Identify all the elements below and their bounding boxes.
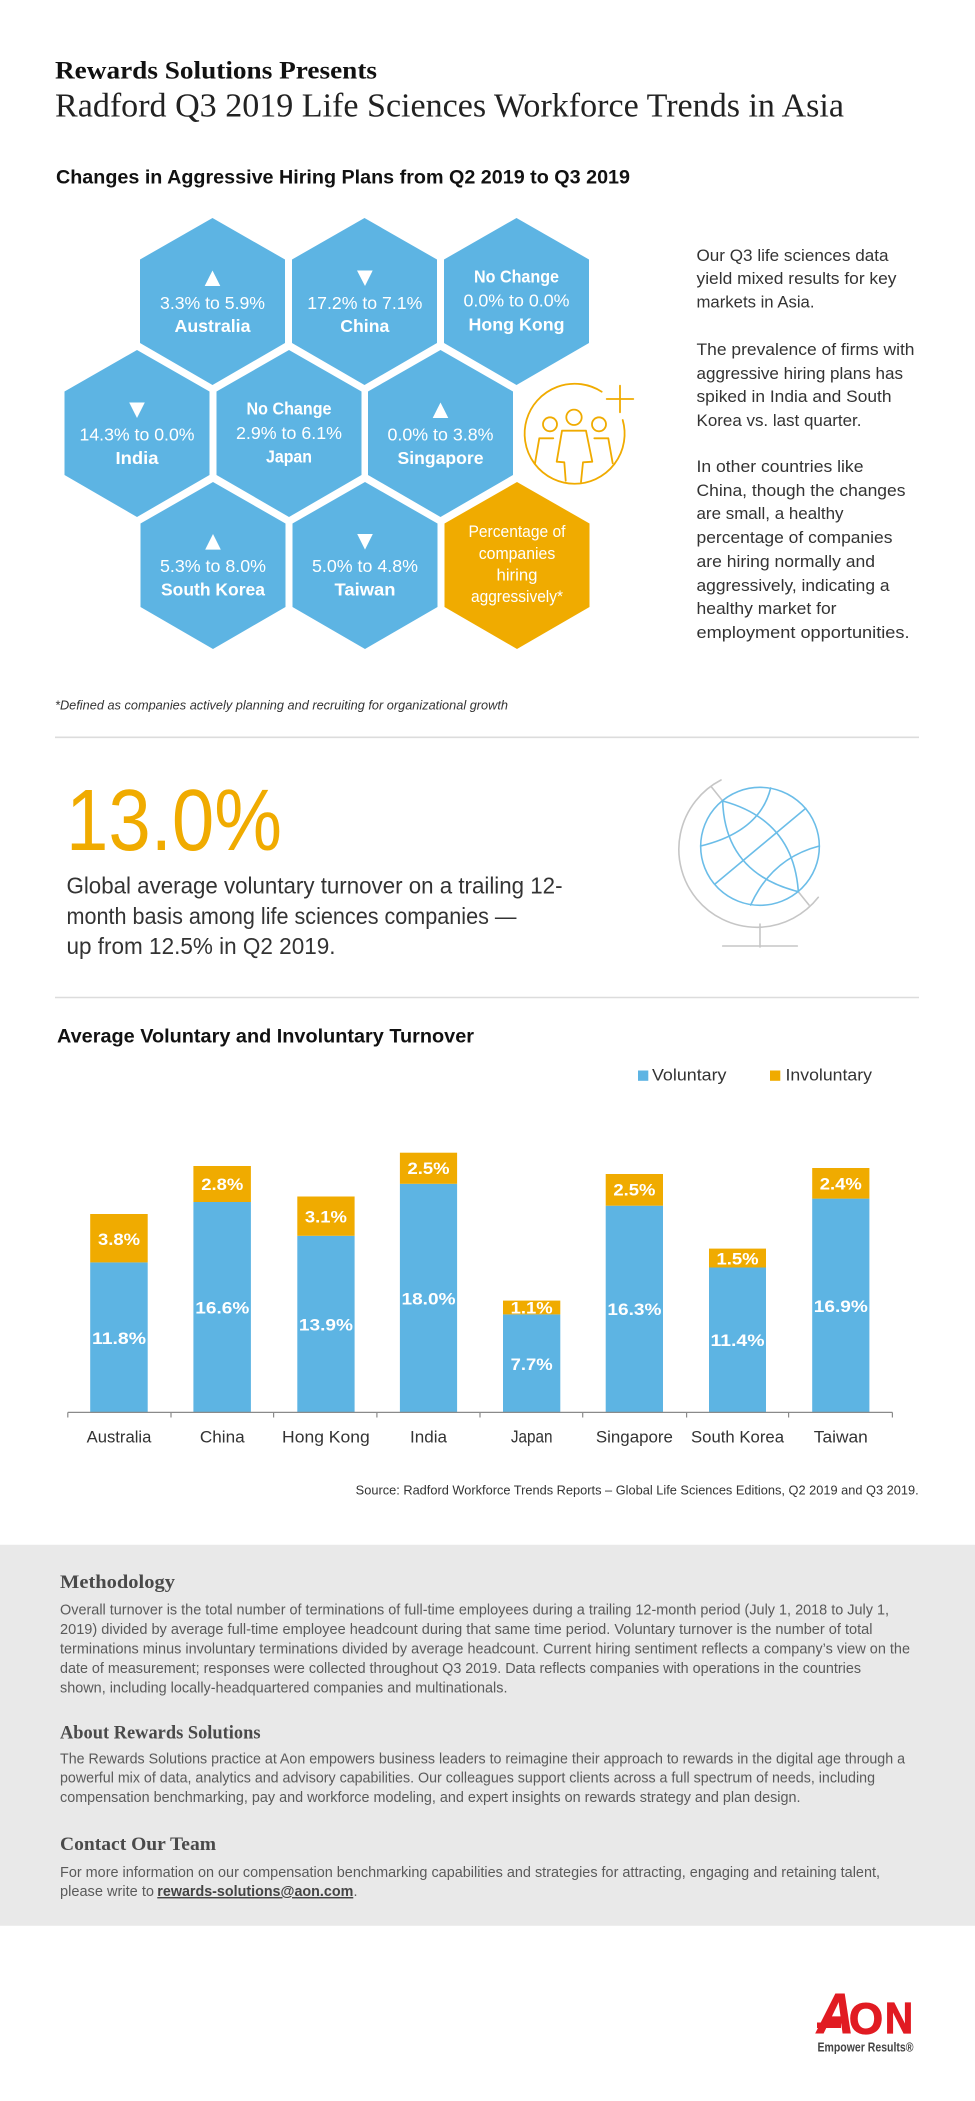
hexagon: South Korea — [140, 482, 286, 649]
bar: Taiwan: 2.4% — [820, 1174, 862, 1193]
logo: Aon Empower Results: N — [885, 1994, 913, 2043]
section: contact our team: For more information on our compensation benchmarking capabilities and strategies for attracting, engaging and retaining talent, — [60, 1865, 880, 1881]
section: contact our team: rewards-solutions@aon.com — [157, 1884, 353, 1900]
section: contact our team: . — [354, 1884, 357, 1900]
bar: Australia: Australia — [87, 1428, 152, 1446]
right column commentary — [696, 246, 914, 642]
right column commentary: employment opportunities. — [696, 623, 910, 642]
bar: Singapore — [596, 1174, 673, 1446]
bar: China — [193, 1166, 251, 1446]
chart legend: Voluntary — [652, 1066, 727, 1085]
hexagon: Australia: 3.3% to 5.9% — [160, 293, 265, 313]
right column commentary: percentage of companies — [696, 528, 892, 547]
bar: South Korea: 11.4% — [710, 1331, 764, 1350]
bar: India — [400, 1153, 457, 1446]
bar: China: 16.6% — [195, 1298, 249, 1317]
bar: Singapore: Singapore — [596, 1428, 673, 1446]
hexagon: Hong Kong: 0.0% to 0.0% — [464, 290, 570, 310]
title block — [55, 56, 844, 125]
panel: methodology, about and contact — [0, 1545, 975, 1926]
hexagon: legend, percentage of companies hiring aggressively: hiring — [496, 566, 538, 584]
hexagon: legend, percentage of companies hiring aggressively: aggressively* — [471, 588, 564, 606]
bar: Taiwan — [812, 1168, 869, 1446]
hexagon: Hong Kong: Hong Kong — [468, 314, 564, 334]
right column commentary: are small, a healthy — [696, 504, 844, 523]
source note: Source: Radford Workforce Trends Reports – Global Life Sciences Editions, Q2 2019 and Q3 2019. — [356, 1484, 919, 1498]
section: methodology: 2019) divided by average full-time employee headcount during that same time period. Voluntary turnover is the number of total — [60, 1622, 872, 1638]
bar: Japan: 7.7% — [511, 1355, 553, 1374]
section: methodology — [60, 1573, 910, 1697]
heading: aggressive hiring plans: Changes in Aggressive Hiring Plans from Q2 2019 to Q3 2019 — [56, 168, 630, 188]
bar: Australia — [87, 1214, 152, 1446]
section: about rewards solutions: powerful mix of data, analytics and advisory capabilities. Our colleagues support clients across a full spectrum of needs, including — [60, 1771, 875, 1787]
hexagon: Australia — [140, 218, 285, 385]
hexagon: China: 17.2% to 7.1% — [307, 293, 422, 313]
section: contact our team — [60, 1835, 880, 1900]
hexagon: Taiwan: 5.0% to 4.8% — [312, 556, 418, 576]
section: about rewards solutions: compensation benchmarking, pay and workforce modeling, and expert insights on rewards strategy and plan design. — [60, 1790, 800, 1806]
section: methodology: Methodology — [60, 1573, 176, 1593]
footnote: *Defined as companies actively planning and recruiting for organizational growth — [55, 698, 508, 712]
hexagon: Singapore: 0.0% to 3.8% — [388, 424, 494, 444]
section: about rewards solutions: The Rewards Solutions practice at Aon empowers business leaders to reimagine their approach to rewards in the digital age through a — [60, 1751, 905, 1767]
stat: 13.0% global turnover: up from 12.5% in Q2 2019. — [66, 933, 336, 959]
hexagon: India — [64, 350, 210, 517]
bar: Japan: 1.1% — [511, 1299, 553, 1318]
bar: India: 2.5% — [408, 1159, 450, 1178]
stat: 13.0% global turnover: 13.0% — [66, 772, 282, 869]
section: methodology: shown, including locally-headquartered companies and multinationals. — [60, 1681, 507, 1697]
bar: India: 18.0% — [402, 1290, 456, 1309]
right column commentary: Our Q3 life sciences data — [696, 246, 889, 265]
section: methodology: terminations minus involuntary terminations divided by average headcount. Current hiring sentiment reflects a company’s view on the — [60, 1641, 910, 1657]
hexagon: Taiwan: Taiwan — [334, 580, 396, 600]
bar: Hong Kong: Hong Kong — [282, 1428, 370, 1446]
bar: South Korea — [691, 1249, 785, 1446]
title block: Radford Q3 2019 Life Sciences Workforce Trends in Asia — [55, 88, 844, 125]
hexagon: Australia: Australia — [174, 316, 251, 336]
stacked bar chart — [68, 1153, 892, 1446]
bar: Japan — [503, 1299, 560, 1446]
right column commentary: are hiring normally and — [696, 552, 875, 571]
right column commentary: yield mixed results for key — [696, 269, 897, 288]
hexagon: Singapore: Singapore — [398, 448, 484, 468]
section: contact our team: Contact Our Team — [60, 1835, 217, 1855]
right column commentary: China, though the changes — [696, 481, 906, 500]
section: about rewards solutions — [60, 1724, 905, 1806]
chart axis — [68, 1412, 892, 1418]
section: methodology: Overall turnover is the total number of terminations of full-time employees during a trailing 12-month period (July 1, 2018 to July 1, — [60, 1602, 889, 1618]
section: contact our team: please write to — [60, 1884, 154, 1900]
section: methodology: date of measurement; responses were collected throughout Q3 2019. Data reflects companies with operations in the countries — [60, 1661, 861, 1677]
heading: turnover chart: Average Voluntary and Involuntary Turnover — [57, 1026, 475, 1048]
logo: Aon Empower Results: O — [849, 1994, 883, 2044]
stat: 13.0% global turnover — [66, 772, 562, 959]
hexagon: India: 14.3% to 0.0% — [80, 424, 194, 444]
bar: Hong Kong: 3.1% — [305, 1208, 347, 1227]
bar: Singapore: 2.5% — [613, 1180, 655, 1200]
logo: Aon Empower Results: Empower Results® — [818, 2041, 914, 2055]
hexagon: legend, percentage of companies hiring aggressively: companies — [479, 545, 555, 563]
hexagon: China: China — [340, 316, 390, 336]
bar: South Korea: 1.5% — [716, 1249, 758, 1268]
hexagon grid — [64, 218, 590, 649]
right column commentary: The prevalence of firms with — [696, 340, 914, 359]
bar: Hong Kong: 13.9% — [299, 1316, 353, 1335]
icon: globe — [679, 780, 819, 947]
logo: Aon Empower Results — [815, 1982, 914, 2055]
bar: Australia: 3.8% — [98, 1230, 140, 1249]
hexagon: Japan: No Change — [246, 398, 332, 418]
hexagon: South Korea: 5.3% to 8.0% — [160, 556, 266, 576]
chart legend — [638, 1066, 873, 1085]
icon: people in a circle with plus sign — [525, 384, 633, 484]
stat: 13.0% global turnover: Global average voluntary turnover on a trailing 12- — [66, 872, 562, 898]
bar: India: India — [410, 1428, 448, 1446]
bar: Hong Kong — [282, 1196, 370, 1446]
chart legend: Involuntary — [786, 1066, 873, 1085]
hexagon: legend, percentage of companies hiring aggressively: Percentage of — [468, 523, 566, 541]
section: about rewards solutions: About Rewards Solutions — [60, 1724, 260, 1744]
hexagon: Japan: Japan — [266, 446, 312, 466]
bar: China: 2.8% — [201, 1175, 243, 1194]
bar: Australia: 11.8% — [92, 1329, 146, 1348]
right column commentary: aggressive hiring plans has — [696, 364, 903, 383]
bar: Singapore: 16.3% — [607, 1300, 661, 1319]
right column commentary: markets in Asia. — [696, 292, 814, 312]
right column commentary: spiked in India and South — [696, 387, 892, 406]
hexagon: China — [292, 218, 437, 385]
bar: Taiwan: Taiwan — [814, 1428, 868, 1446]
hexagon: Japan — [216, 350, 362, 517]
right column commentary: In other countries like — [696, 457, 864, 476]
bar: China: China — [200, 1428, 246, 1446]
title block: Rewards Solutions Presents — [55, 56, 377, 84]
hexagon: Taiwan — [292, 482, 438, 649]
hexagon: South Korea: South Korea — [161, 580, 265, 600]
hexagon: Hong Kong — [444, 218, 589, 385]
right column commentary: aggressively, indicating a — [696, 576, 890, 595]
bar: Japan: Japan — [511, 1426, 553, 1446]
right column commentary: healthy market for — [696, 599, 837, 618]
hexagon: Japan: 2.9% to 6.1% — [236, 423, 342, 443]
hexagon: India: India — [116, 448, 159, 468]
right column commentary: Korea vs. last quarter. — [696, 411, 862, 430]
bar: Taiwan: 16.9% — [814, 1297, 868, 1316]
hexagon: Hong Kong: No Change — [474, 266, 559, 286]
hexagon: legend, percentage of companies hiring aggressively — [444, 482, 590, 649]
stat: 13.0% global turnover: month basis among life sciences companies — — [66, 903, 516, 929]
hexagon: Singapore — [368, 350, 513, 517]
logo: Aon Empower Results: A — [815, 1982, 854, 2046]
bar: South Korea: South Korea — [691, 1428, 785, 1446]
